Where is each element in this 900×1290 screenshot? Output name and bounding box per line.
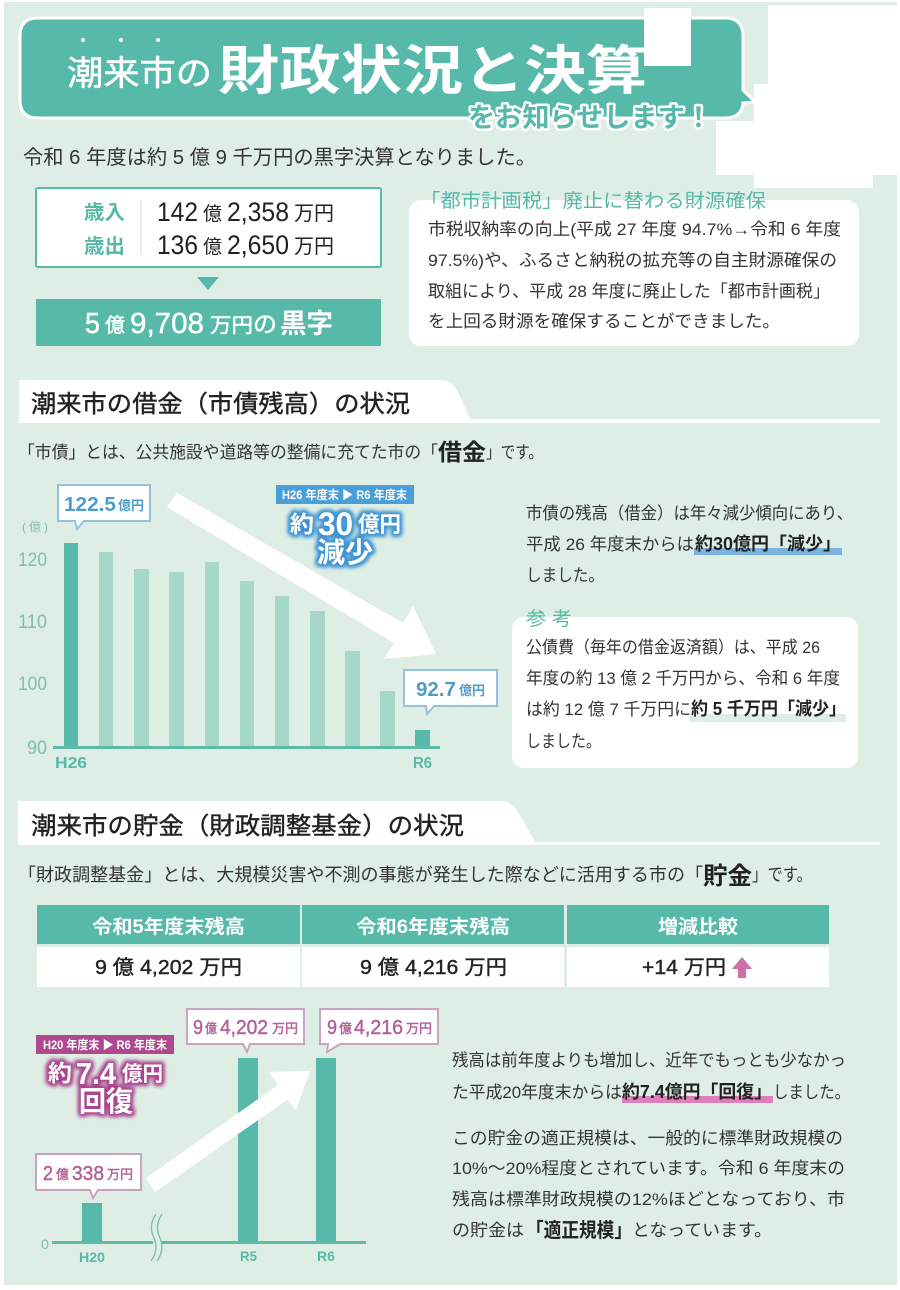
text block: savings explanation: 「適正規模」 — [526, 1219, 632, 1242]
icon: up arrow — [732, 957, 752, 978]
axis labels — [41, 1236, 335, 1265]
savings definition: 「財政調整基金」とは、大規模災害や不測の事態が発生した際などに活用する市の「 — [18, 865, 703, 885]
panel: city planning tax replacement: 97.5%)や、ふるさと納税の拡充等の自主財源確保の — [428, 251, 837, 270]
callout: about 30 oku decrease: 約 — [290, 511, 314, 537]
panel: city planning tax replacement: 「都市計画税」廃止に替わる財源確保 — [420, 190, 766, 212]
text block: savings explanation: た平成20年度末からは — [452, 1083, 622, 1102]
table header — [37, 905, 829, 944]
callout: about 7.4 oku recovery: 約 — [48, 1060, 72, 1086]
panel: reference — [512, 608, 858, 768]
callout: 92.7: 92.7 — [416, 679, 456, 701]
arrow: recovery — [146, 1071, 310, 1192]
badge: period H20 to R6 — [36, 1035, 174, 1054]
axis break — [151, 1214, 162, 1261]
section heading: savings — [18, 801, 880, 845]
badge: period H20 to R6: H20 年度末 ▶ R6 年度末 — [43, 1037, 167, 1052]
title banner: をお知らせします！ — [468, 103, 712, 133]
callout: H20 balance: 億 — [56, 1167, 69, 1182]
callout: about 7.4 oku recovery: 7.4 — [76, 1056, 117, 1091]
panel: surplus: 万円 — [210, 315, 253, 337]
callout: 92.7: 億円 — [459, 683, 485, 698]
title banner — [20, 18, 755, 133]
panel: city planning tax replacement: を上回る財源を確保することができました。 — [428, 312, 780, 331]
bar chart: debt balance — [18, 485, 497, 772]
callout: about 30 oku decrease: 億円 — [358, 512, 401, 537]
x axis labels: H26 — [55, 755, 87, 772]
section heading: debt — [19, 380, 880, 423]
axis labels: 0 — [41, 1236, 49, 1252]
text block: debt trend: 市債の残高（借金）は年々減少傾向にあり、 — [526, 504, 853, 523]
y axis labels — [18, 520, 48, 759]
callout: R5 balance — [187, 1009, 304, 1052]
callout: about 7.4 oku recovery: 回復 — [79, 1086, 133, 1117]
x axis labels: R6 — [413, 755, 432, 772]
debt definition: 」です。 — [486, 443, 543, 462]
panel: city planning tax replacement — [409, 190, 859, 346]
panel: revenue and expenditure: 2,650 — [227, 230, 289, 260]
arrow: decrease — [167, 493, 436, 659]
panel: revenue and expenditure — [36, 188, 381, 267]
panel: reference: は約 12 億 7 千万円に — [526, 700, 691, 719]
arrow: down triangle — [197, 277, 219, 290]
axis labels: R6 — [317, 1248, 335, 1264]
y axis labels: ( 億 ) — [22, 520, 48, 534]
callout: about 7.4 oku recovery: 億円 — [122, 1063, 163, 1086]
table body — [37, 947, 829, 987]
white masked patches — [644, 5, 900, 188]
debt definition: 借金 — [438, 439, 486, 465]
y axis labels: 110 — [18, 612, 47, 633]
callout: H20 balance: 2 — [43, 1163, 53, 1185]
panel: surplus: 9,708 — [130, 308, 204, 340]
panel: reference: 約 5 千万円「減少」 — [691, 698, 846, 719]
panel: reference: 公債費（毎年の借金返済額）は、平成 26 — [526, 638, 820, 657]
callout: R5 balance: 万円 — [272, 1021, 298, 1036]
table header: 増減比較 — [658, 915, 738, 938]
callout: about 30 oku decrease: 減少 — [317, 537, 373, 568]
title dots — [81, 38, 160, 42]
table header: 令和6年度末残高 — [356, 915, 510, 938]
text block: debt trend: 約30億円「減少」 — [695, 533, 841, 554]
axis labels: R5 — [240, 1248, 257, 1264]
savings definition: 貯金 — [703, 863, 752, 890]
text block: savings explanation — [452, 1051, 850, 1242]
text block: savings explanation: となっています。 — [632, 1221, 772, 1240]
table body: 9 億 4,202 万円 — [95, 956, 242, 979]
callout: 92.7 — [404, 670, 497, 714]
badge: period H26 to R6: H26 年度末 ▶ R6 年度末 — [282, 487, 407, 502]
section heading: savings: 潮来市の貯金（財政調整基金）の状況 — [31, 813, 464, 840]
callout: R5 balance: 億 — [205, 1021, 217, 1036]
text block: savings explanation: この貯金の適正規模は、一般的に標準財政規模の — [452, 1129, 843, 1148]
callout: H20 balance: 338 — [72, 1163, 104, 1185]
y axis labels: 90 — [27, 738, 47, 759]
table body: +14 万円 — [642, 957, 726, 979]
text block: savings explanation: 10%～20%程度とされています。令和 6 年度末の — [452, 1159, 845, 1178]
bars — [82, 1058, 336, 1243]
table body: 9 億 4,216 万円 — [360, 956, 507, 979]
callout: 122.5 — [58, 485, 150, 529]
savings definition: 」です。 — [752, 865, 812, 885]
callout: R6 balance: 万円 — [406, 1021, 432, 1036]
lead sentence: 令和 6 年度は約 5 億 9 千万円の黒字決算となりました。 — [23, 146, 536, 169]
debt definition: 「市債」とは、公共施設や道路等の整備に充てた市の「 — [18, 443, 438, 462]
panel: revenue and expenditure: 歳出 — [84, 235, 125, 258]
callout: R6 balance: 9 — [327, 1017, 337, 1039]
text block: debt trend: しました。 — [526, 566, 604, 585]
panel: surplus: の — [253, 311, 277, 337]
panel: reference: 年度の約 13 億 2 千万円から、令和 6 年度 — [526, 669, 840, 688]
text block: debt trend — [526, 504, 853, 585]
badge: period H26 to R6 — [276, 485, 414, 504]
panel: revenue and expenditure: 万円 — [294, 236, 334, 258]
text block: savings explanation: 残高は標準財政規模の12%ほどとなっており、市 — [452, 1190, 845, 1209]
callout: H20 balance — [36, 1154, 141, 1198]
savings definition — [18, 863, 812, 890]
panel: city planning tax replacement: 取組により、平成 28 年度に廃止した「都市計画税」 — [428, 282, 830, 301]
panel: reference: 参 考 — [526, 608, 572, 630]
table header: 令和5年度末残高 — [92, 915, 245, 938]
bar chart: savings fund — [36, 1009, 438, 1265]
text block: savings explanation: 残高は前年度よりも増加し、近年でもっとも少なかっ — [452, 1051, 846, 1070]
panel: revenue and expenditure: 万円 — [294, 203, 334, 225]
debt definition — [18, 439, 543, 465]
callout: about 7.4 oku recovery — [48, 1056, 163, 1117]
panel: revenue and expenditure: 2,358 — [227, 197, 289, 227]
panel: reference: しました。 — [526, 732, 601, 751]
y axis labels: 100 — [18, 674, 47, 695]
callout: H20 balance: 万円 — [107, 1167, 133, 1182]
panel: surplus: 5 — [85, 308, 100, 340]
panel: revenue and expenditure: 億 — [203, 236, 222, 258]
title banner: 財政状況と決算 — [218, 42, 647, 101]
panel: revenue and expenditure: 億 — [203, 203, 222, 225]
callout: about 30 oku decrease: 30 — [318, 506, 353, 542]
callout: R6 balance — [320, 1009, 438, 1052]
y axis labels: 120 — [18, 550, 47, 571]
callout: R6 balance: 4,216 — [354, 1017, 403, 1039]
callout: 122.5: 122.5 — [64, 494, 116, 516]
axis labels: H20 — [79, 1249, 105, 1265]
panel: surplus: 黒字 — [280, 309, 333, 339]
callout: about 30 oku decrease — [290, 506, 401, 568]
section heading: debt: 潮来市の借金（市債残高）の状況 — [31, 391, 410, 418]
panel: revenue and expenditure: 136 — [157, 230, 198, 260]
bars — [64, 543, 430, 747]
panel: revenue and expenditure: 142 — [157, 197, 198, 227]
text block: savings explanation: 約7.4億円「回復」 — [622, 1082, 772, 1102]
table: savings balance — [37, 905, 829, 987]
callout: R6 balance: 億 — [339, 1021, 352, 1036]
x axis labels — [55, 755, 432, 772]
text block: debt trend: 平成 26 年度末からは — [526, 535, 694, 554]
title banner: 潮来市の — [67, 55, 212, 93]
panel: surplus: 億 — [105, 314, 125, 337]
callout: R5 balance: 9 — [193, 1017, 203, 1039]
panel: revenue and expenditure: 歳入 — [84, 201, 125, 224]
text block: savings explanation: しました。 — [773, 1083, 850, 1102]
text block: savings explanation: の貯金は — [452, 1221, 524, 1240]
callout: 122.5: 億円 — [118, 498, 144, 513]
callout: R5 balance: 4,202 — [220, 1017, 268, 1039]
panel: city planning tax replacement: 市税収納率の向上(平成 27 年度 94.7%→令和 6 年度 — [428, 220, 841, 239]
panel: surplus — [36, 299, 381, 346]
